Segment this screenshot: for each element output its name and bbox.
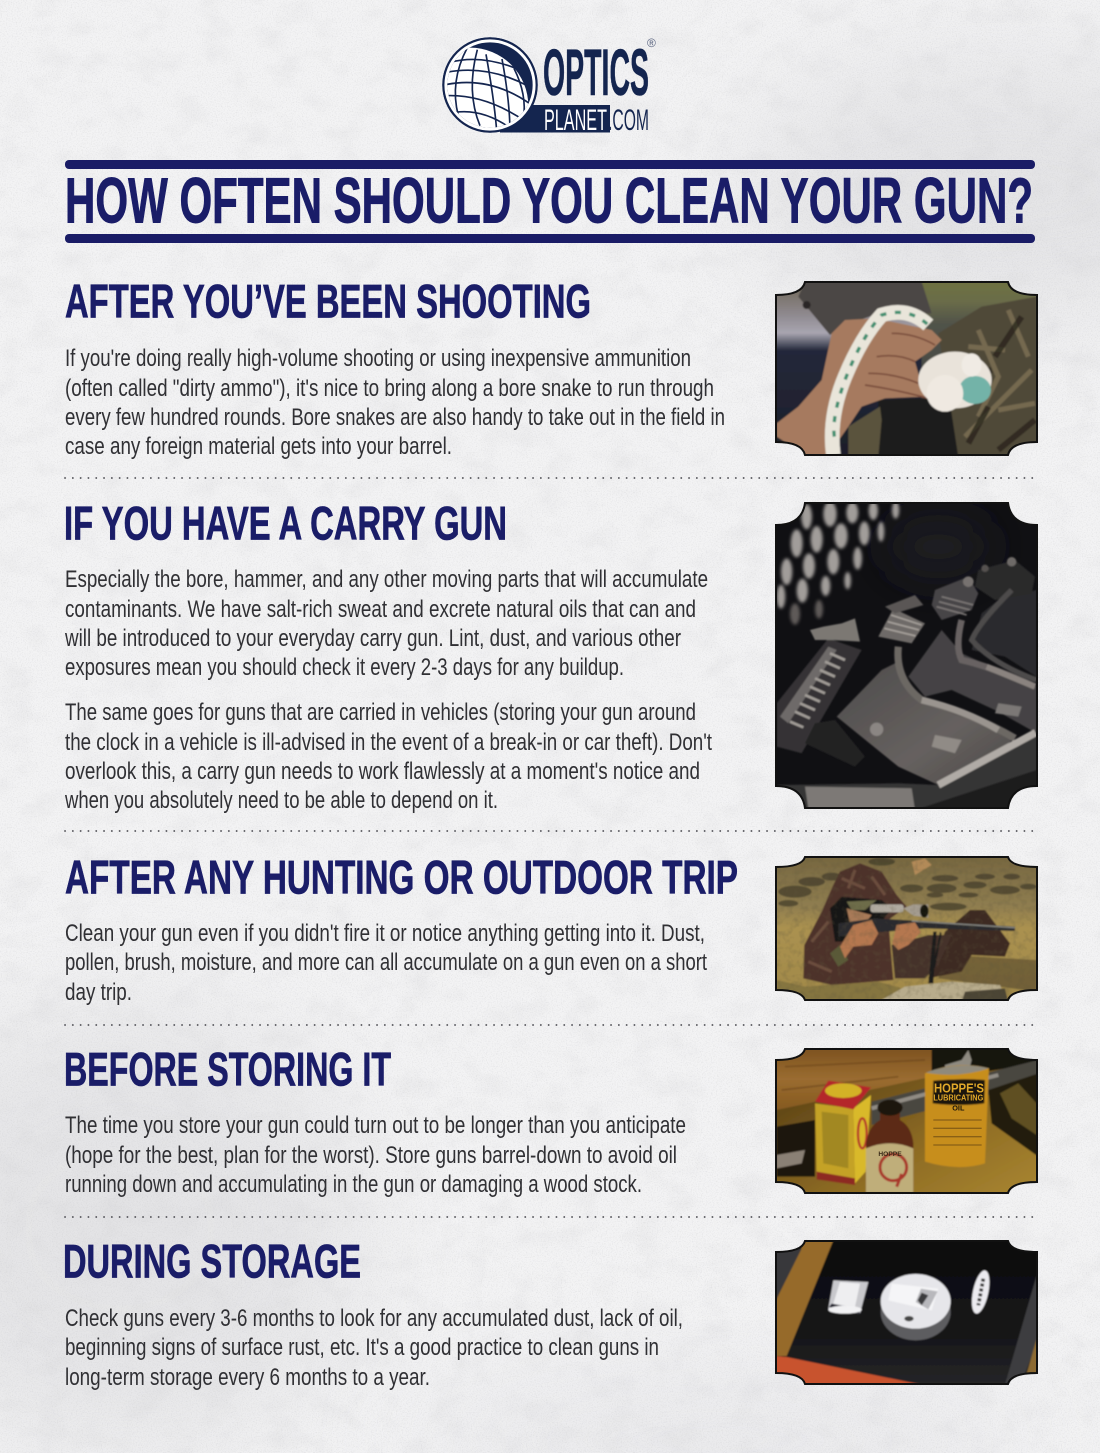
heading: AFTER ANY HUNTING OR OUTDOOR TRIP (65, 850, 738, 904)
body text: paragraph 2: when you absolutely need to be able to depend on it. (64, 787, 498, 814)
section 5: during storage (63, 1234, 1038, 1391)
photo: Hoppe's cleaning products: HOPPE (878, 1151, 902, 1158)
body text (65, 920, 707, 1006)
body text: paragraph 2: the clock in a vehicle is ill-advised in the event of a break-in or car theft). Don't (65, 729, 712, 756)
photo: Hoppe's cleaning products: OIL (952, 1104, 965, 1113)
logo word .COM: .COM (608, 104, 649, 137)
section 3: hunting trip (65, 850, 1038, 1006)
logo word PLANET: PLANET (544, 104, 607, 137)
body text: If you're doing really high-volume shooting or using inexpensive ammunition (65, 345, 691, 372)
body text: long-term storage every 6 months to a year. (65, 1364, 430, 1391)
text: OPTICS (543, 35, 649, 109)
divider: dotted line 4 (65, 1216, 1035, 1218)
photo: row of handguns (775, 500, 1038, 813)
logo: OpticsPlanet.com (442, 37, 656, 133)
heading: AFTER YOU’VE BEEN SHOOTING (65, 274, 591, 328)
body text: running down and accumulating in the gun or damaging a wood stock. (65, 1171, 642, 1198)
body text: paragraph 2: overlook this, a carry gun needs to work flawlessly at a moment's notice and (65, 758, 700, 785)
body text: (often called "dirty ammo"), it's nice to bring along a bore snake to run through (65, 375, 714, 402)
rock and foreground grass (878, 982, 1007, 1002)
gun 1 slide (777, 638, 862, 753)
photo: bore snake in hand (775, 280, 1038, 457)
logo bar behind PLANET (500, 105, 610, 132)
sleeve cuff (830, 945, 848, 967)
can label text: HOPPE'S (934, 1081, 984, 1096)
photo: gun safe interior (775, 1240, 1038, 1387)
logo globe (442, 37, 538, 133)
torso and hood (803, 863, 907, 985)
body text: every few hundred rounds. Bore snakes are also handy to take out in the field in (65, 404, 725, 431)
body text: paragraph 1: contaminants. We have salt-rich sweat and excrete natural oils that can and (65, 596, 696, 623)
section 2: carry gun (64, 496, 1038, 814)
body text: pollen, brush, moisture, and more can all accumulate on a gun even on a short (65, 949, 707, 976)
heading: DURING STORAGE (63, 1234, 361, 1288)
body text: paragraph 2: The same goes for guns that are carried in vehicles (storing your gun around (65, 699, 696, 726)
body text: case any foreign material gets into your barrel. (65, 433, 452, 460)
body text (65, 1112, 686, 1198)
body text: paragraph 1 (64, 566, 708, 681)
title block (65, 160, 1035, 243)
photo: hunter aiming rifle (775, 855, 1038, 1002)
body text: The time you store your gun could turn out to be longer than you anticipate (65, 1112, 686, 1139)
divider: dotted line 2 (65, 830, 1035, 832)
leg (928, 910, 1010, 978)
body text: beginning signs of surface rust, etc. It's a good practice to clean guns in (65, 1334, 659, 1361)
section 4: before storing (64, 1042, 1038, 1198)
body text: paragraph 2 (64, 699, 712, 814)
body text (65, 1305, 683, 1391)
rifle (838, 918, 1015, 937)
hands (840, 920, 878, 958)
body text: paragraph 1: will be introduced to your everyday carry gun. Lint, dust, and various other (64, 625, 681, 652)
body text: (hope for the best, plan for the worst). Store guns barrel-down to avoid oil (65, 1142, 677, 1169)
body text: day trip. (65, 979, 132, 1006)
body text: paragraph 1: Especially the bore, hammer, and any other moving parts that will accumulate (65, 566, 708, 593)
section 1: after shooting (65, 274, 1038, 460)
gun 1 grip (837, 660, 1015, 785)
body text: Check guns every 3-6 months to look for any accumulated dust, lack of oil, (65, 1305, 683, 1332)
divider: dotted line 1 (65, 477, 1035, 479)
heading: IF YOU HAVE A CARRY GUN (64, 496, 507, 550)
body text: Clean your gun even if you didn't fire it or notice anything getting into it. Dust, (65, 920, 705, 947)
bottom band (778, 736, 1036, 807)
heading: BEFORE STORING IT (64, 1042, 391, 1096)
gun 2 (908, 630, 1037, 733)
photo: Hoppe's cleaning products: LUBRICATING (933, 1094, 983, 1103)
body text: paragraph 1: exposures mean you should check it every 2-3 days for any buildup. (65, 654, 624, 681)
body text (65, 345, 725, 460)
divider: dotted line 3 (65, 1024, 1035, 1026)
gun 3 (972, 590, 1037, 677)
photo: Hoppe's cleaning products (775, 1048, 1038, 1195)
registered mark: ® (647, 36, 656, 50)
